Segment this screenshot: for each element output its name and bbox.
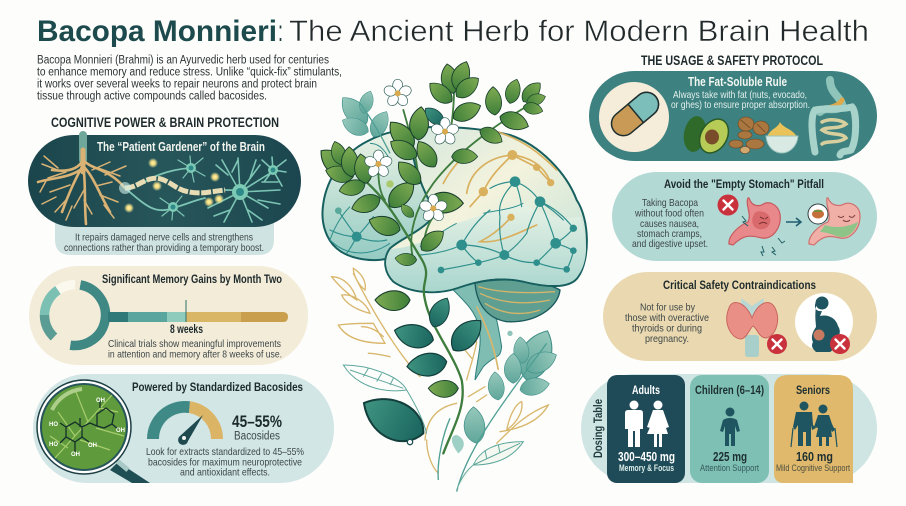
column: seniors: 160 mg [796, 450, 833, 464]
brain lower lobe shading [386, 203, 586, 291]
title: : [278, 15, 283, 48]
teal neural network [330, 176, 577, 273]
description: or ghes) to ensure proper absorption. [671, 99, 810, 111]
title: The Ancient Herb for Modern Brain Health [289, 15, 869, 48]
main vine [333, 80, 543, 453]
flowers [363, 79, 460, 223]
panel: patient gardener [28, 135, 301, 255]
icon: magnifier [37, 380, 150, 483]
description: Not for use by [640, 302, 696, 314]
column: children [690, 375, 769, 483]
title: Bacopa Monnieri [37, 15, 277, 48]
description: stomach cramps, [637, 228, 702, 240]
description: pregnancy. [645, 333, 689, 345]
icon: red cross [718, 194, 738, 216]
gold neural network [443, 132, 557, 242]
panel title: The “Patient Gardener” of the Brain [97, 139, 265, 154]
description [671, 89, 810, 111]
panel title: Avoid the "Empty Stomach" Pitfall [664, 177, 824, 191]
sparks [119, 158, 224, 213]
description: and digestive upset. [632, 238, 708, 250]
green leaves [314, 59, 547, 397]
small accent dots [407, 331, 513, 445]
description: Taking Bacopa [642, 197, 698, 209]
description [632, 197, 708, 250]
icon: adult figures [625, 400, 669, 447]
panel: fat soluble rule [589, 71, 877, 161]
icon: nuts [729, 117, 769, 154]
axon: myelin segments [125, 178, 225, 193]
caption: patient gardener [55, 222, 274, 255]
label: 8 weeks: 8 weeks [170, 324, 203, 336]
description: thyroids or during [632, 322, 702, 334]
brain folds [330, 143, 523, 253]
title [37, 15, 869, 48]
icon: magnifier: OH [116, 428, 125, 434]
icon: neurons [125, 156, 286, 222]
gold background foliage [332, 268, 548, 473]
stat: 45-55% bacosides: Bacosides [234, 430, 280, 442]
icon: ghee bowl [766, 122, 798, 153]
icon: irritated stomach [729, 198, 785, 256]
column: adults: Adults [632, 383, 660, 397]
panel title: The Fat-Soluble Rule [688, 75, 787, 89]
icon: magnifier: OH [71, 452, 80, 458]
icon: magnifier: HO [49, 442, 58, 448]
caption: patient gardener: It repairs damaged nerve cells and strengthens [75, 232, 253, 244]
description [625, 302, 709, 345]
column: children: Attention Support [700, 463, 759, 474]
description: bacosides for maximum neuroprotective [148, 456, 302, 468]
intro text block: it works over several weeks to repair neurons and protect brain [37, 78, 317, 90]
panel title: Significant Memory Gains by Month Two [102, 272, 282, 286]
arrow [786, 218, 801, 226]
dark teal leaves [355, 104, 488, 451]
panel title: Powered by Standardized Bacosides [132, 380, 303, 394]
panel: dosing table [581, 374, 877, 483]
icon: food bubble [808, 204, 828, 224]
column: adults: Memory & Focus [619, 463, 674, 474]
panel: empty stomach [612, 172, 877, 261]
chart: gauge [147, 401, 223, 445]
panel: bacosides [33, 374, 334, 483]
icon: digestive system [812, 80, 856, 155]
description: Look for extracts standardized to 45–55% [146, 446, 304, 458]
icon: magnifier: OH [88, 443, 97, 449]
brain back lobe [322, 128, 460, 260]
stat: 45-55% bacosides [232, 412, 282, 442]
description: Always take with fat (nuts, evocado, [673, 89, 807, 101]
icon: happy stomach [809, 198, 860, 245]
icon: child figure [720, 408, 740, 446]
column: children: Children (6–14) [695, 385, 764, 397]
icon: capsule [599, 82, 669, 152]
icon: thyroid [727, 298, 787, 357]
intro text block [37, 54, 342, 102]
panel: memory gains [29, 266, 308, 365]
heading: usage and safety: THE USAGE & SAFETY PROTOCOL [641, 53, 823, 68]
column: adults [607, 375, 685, 483]
icon: pregnant woman [795, 293, 853, 354]
icon: senior figures [791, 402, 837, 447]
description: in attention and memory after 8 weeks of use. [108, 348, 282, 360]
icon: roots [38, 135, 126, 224]
intro text block: to enhance memory and reduce stress. Unlike “quick-fix” stimulants, [37, 66, 342, 78]
caption: patient gardener: connections rather than providing a temporary boost. [64, 242, 264, 254]
dark pill background [28, 135, 301, 227]
central illustration: brain and bacopa plant [314, 59, 587, 492]
intro text block: Bacopa Monnieri (Brahmi) is an Ayurvedic herb used for centuries [37, 54, 329, 66]
description: causes nausea, [640, 218, 699, 230]
description [146, 446, 304, 478]
description: Clinical trials show meaningful improvements [108, 338, 281, 350]
description: without food often [634, 208, 704, 220]
description: those with overactive [625, 312, 709, 324]
pale teal and outlined foliage [335, 89, 560, 492]
description [108, 338, 282, 360]
stat: 45-55% bacosides: 45–55% [232, 412, 282, 431]
icon: progress ring [40, 280, 110, 350]
column: seniors: Seniors [796, 383, 830, 397]
label: dosing table: Dosing Table [593, 399, 605, 458]
column: seniors: Mild Cognitive Support [776, 463, 850, 474]
intro text block: tissue through active compounds called bacosides. [37, 90, 267, 102]
chart: 8 week progress bar [108, 300, 288, 322]
panel: safety contraindications [603, 272, 877, 361]
column: children: 225 mg [713, 450, 747, 464]
heading: cognitive power: COGNITIVE POWER & BRAIN PROTECTION [51, 115, 279, 130]
icon: magnifier: OH [96, 398, 105, 404]
icon: magnifier: HO [49, 422, 58, 428]
panel title: Critical Safety Contraindications [663, 278, 816, 292]
description: and antioxidant effects. [180, 466, 270, 478]
brain stem and cerebellum [453, 280, 560, 380]
column: adults: 300–450 mg [618, 450, 675, 464]
icon: avocado [681, 114, 734, 158]
brain main [385, 127, 587, 292]
column: seniors [774, 375, 853, 483]
